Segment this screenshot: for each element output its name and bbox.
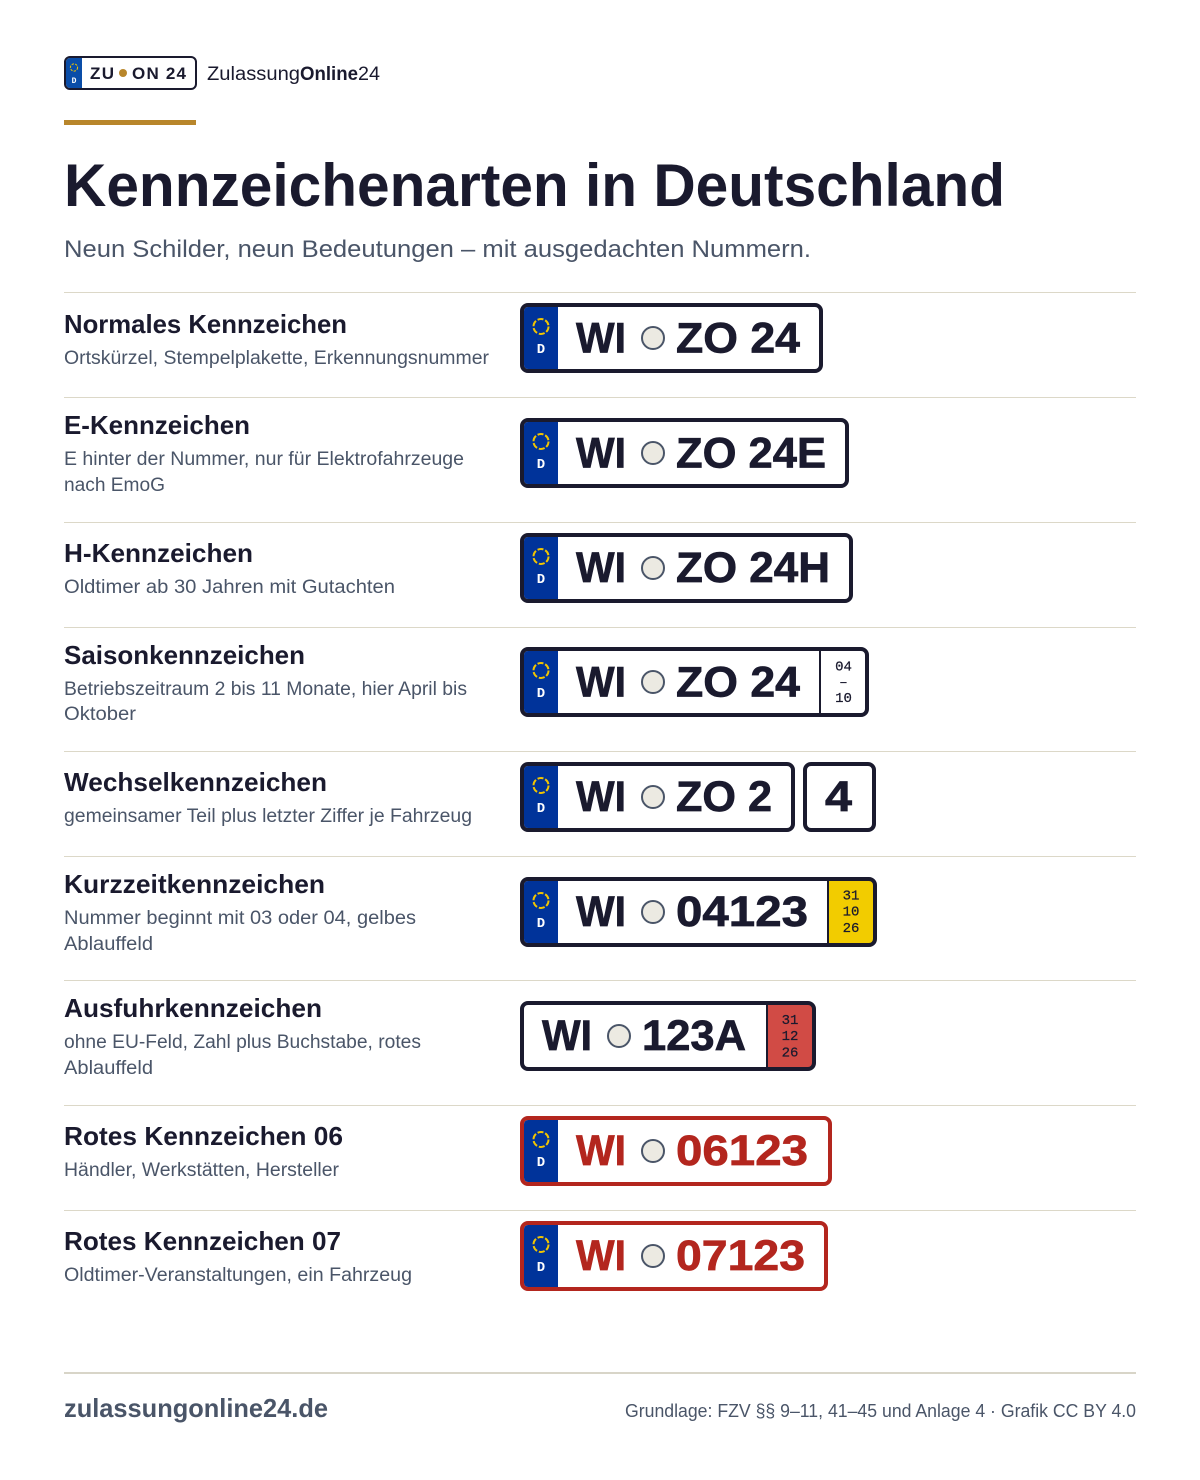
- row: Ausfuhrkennzeichen: [64, 993, 814, 1079]
- brand name: 24: [358, 64, 380, 85]
- plate: red WI 06123: WI: [576, 1127, 626, 1175]
- plate: export WI 123A: 123A: [642, 1012, 746, 1060]
- plate: WI ZO 24H: ZO 24H: [676, 544, 830, 592]
- plate: seasonal WI ZO 24: ZO 24: [676, 658, 800, 706]
- plate: short-term WI 04123: D: [537, 916, 545, 932]
- logo plate: ON 24: [132, 64, 187, 83]
- plate: WI ZO 24H: D: [537, 572, 545, 588]
- plate: seasonal WI ZO 24: WI: [576, 658, 626, 706]
- row text: Wechselkennzeichen: [64, 767, 327, 797]
- source note: Grundlage: FZV §§ 9–11, 41–45 und Anlage 4 · Grafik CC BY 4.0: [625, 1401, 1136, 1421]
- plate: WI ZO 24E: [522, 420, 847, 486]
- plate: seasonal WI ZO 24: [522, 649, 867, 715]
- row text: Ausfuhrkennzeichen: [64, 993, 322, 1023]
- plate: seasonal WI ZO 24: 04: [835, 660, 852, 676]
- plate: WI ZO 24: WI: [576, 314, 626, 362]
- row text: Betriebszeitraum 2 bis 11 Monate, hier April bis: [64, 679, 467, 700]
- row text: H-Kennzeichen: [64, 538, 253, 568]
- brand name: [207, 64, 380, 85]
- row: E-Kennzeichen: [64, 410, 847, 496]
- plate: short-term WI 04123: WI: [576, 888, 626, 936]
- logo plate: D: [72, 77, 77, 86]
- plate: export WI 123A: 31: [782, 1013, 798, 1029]
- plate: red WI 07123: 07123: [676, 1232, 805, 1280]
- row text: [64, 1121, 343, 1181]
- row text: Oktober: [64, 704, 137, 725]
- plate: short-term WI 04123: [522, 879, 875, 945]
- plate: short-term WI 04123: 04123: [676, 888, 808, 936]
- plate: interchangeable WI ZO 2 + 4: ZO 2: [676, 773, 772, 821]
- plate: short-term WI 04123: 31: [843, 888, 859, 904]
- plate: export WI 123A: 26: [782, 1046, 798, 1062]
- row: Kurzzeitkennzeichen: [64, 869, 875, 955]
- row text: [64, 640, 467, 725]
- row text: Ablauffeld: [64, 934, 153, 955]
- plate: seasonal WI ZO 24: –: [839, 675, 848, 691]
- row text: E-Kennzeichen: [64, 410, 250, 440]
- logo: [65, 57, 380, 89]
- plate: red WI 07123: D: [537, 1260, 545, 1276]
- plate: interchangeable WI ZO 2 + 4: D: [537, 801, 545, 817]
- plate: red WI 06123: 06123: [676, 1127, 808, 1175]
- plate: seasonal WI ZO 24: D: [537, 686, 545, 702]
- row text: Rotes Kennzeichen 07: [64, 1226, 341, 1256]
- plate: WI ZO 24: [522, 305, 821, 371]
- row text: [64, 538, 395, 598]
- row text: [64, 767, 472, 827]
- plate: interchangeable WI ZO 2 + 4: 4: [825, 773, 852, 821]
- brand name: Online: [300, 64, 358, 85]
- plate: WI ZO 24E: D: [537, 457, 545, 473]
- plate: red WI 07123: [522, 1223, 826, 1289]
- brand name: Zulassung: [207, 64, 300, 85]
- website: zulassungonline24.de: [64, 1393, 328, 1423]
- plate: short-term WI 04123: 10: [843, 904, 859, 920]
- plate: red WI 06123: [522, 1118, 830, 1184]
- plate: interchangeable WI ZO 2 + 4: [522, 764, 874, 830]
- plate: export WI 123A: WI: [542, 1012, 592, 1060]
- row text: [64, 309, 490, 369]
- row text: Rotes Kennzeichen 06: [64, 1121, 343, 1151]
- row text: gemeinsamer Teil plus letzter Ziffer je Fahrzeug: [64, 806, 472, 827]
- title: Kennzeichenarten in Deutschland: [64, 152, 1005, 219]
- plate: red WI 07123: WI: [576, 1232, 626, 1280]
- logo plate: ZU: [90, 64, 114, 83]
- row: Rotes Kennzeichen 07: [64, 1223, 826, 1289]
- row text: ohne EU-Feld, Zahl plus Buchstabe, rotes: [64, 1032, 421, 1053]
- plate: WI ZO 24E: WI: [576, 430, 626, 478]
- logo plate: [65, 57, 196, 89]
- row text: Saisonkennzeichen: [64, 640, 305, 670]
- plate: export WI 123A: 12: [782, 1029, 798, 1045]
- row text: [64, 1226, 412, 1286]
- row text: Kurzzeitkennzeichen: [64, 869, 325, 899]
- row: Normales Kennzeichen: [64, 305, 821, 371]
- accent bar: [64, 120, 196, 125]
- plate: export WI 123A: [522, 1003, 814, 1069]
- row text: Nummer beginnt mit 03 oder 04, gelbes: [64, 908, 416, 929]
- row text: Ablauffeld: [64, 1058, 153, 1079]
- row text: [64, 869, 416, 955]
- row: H-Kennzeichen: [64, 535, 851, 601]
- row text: E hinter der Nummer, nur für Elektrofahrzeuge: [64, 449, 464, 470]
- row: Wechselkennzeichen: [64, 764, 874, 830]
- row text: Ortskürzel, Stempelplakette, Erkennungsnummer: [64, 348, 490, 369]
- plate: seasonal WI ZO 24: 10: [835, 691, 852, 707]
- plate: WI ZO 24: ZO 24: [676, 314, 800, 362]
- plate: short-term WI 04123: 26: [843, 921, 859, 937]
- subtitle: Neun Schilder, neun Bedeutungen – mit ausgedachten Nummern.: [64, 236, 811, 263]
- row: Rotes Kennzeichen 06: [64, 1118, 830, 1184]
- plate: WI ZO 24H: [522, 535, 851, 601]
- row text: [64, 993, 421, 1079]
- row: Saisonkennzeichen: [64, 640, 867, 725]
- plate: WI ZO 24E: ZO 24E: [676, 430, 826, 478]
- row text: Händler, Werkstätten, Hersteller: [64, 1160, 340, 1181]
- plate: red WI 06123: D: [537, 1155, 545, 1171]
- row text: [64, 410, 464, 496]
- plate: WI ZO 24H: WI: [576, 544, 626, 592]
- plate: interchangeable WI ZO 2 + 4: WI: [576, 773, 626, 821]
- plate: WI ZO 24: D: [537, 342, 545, 358]
- row text: Oldtimer ab 30 Jahren mit Gutachten: [64, 577, 395, 598]
- row text: Normales Kennzeichen: [64, 309, 347, 339]
- row text: Oldtimer-Veranstaltungen, ein Fahrzeug: [64, 1265, 412, 1286]
- footer: [64, 1393, 1136, 1423]
- row text: nach EmoG: [64, 475, 165, 496]
